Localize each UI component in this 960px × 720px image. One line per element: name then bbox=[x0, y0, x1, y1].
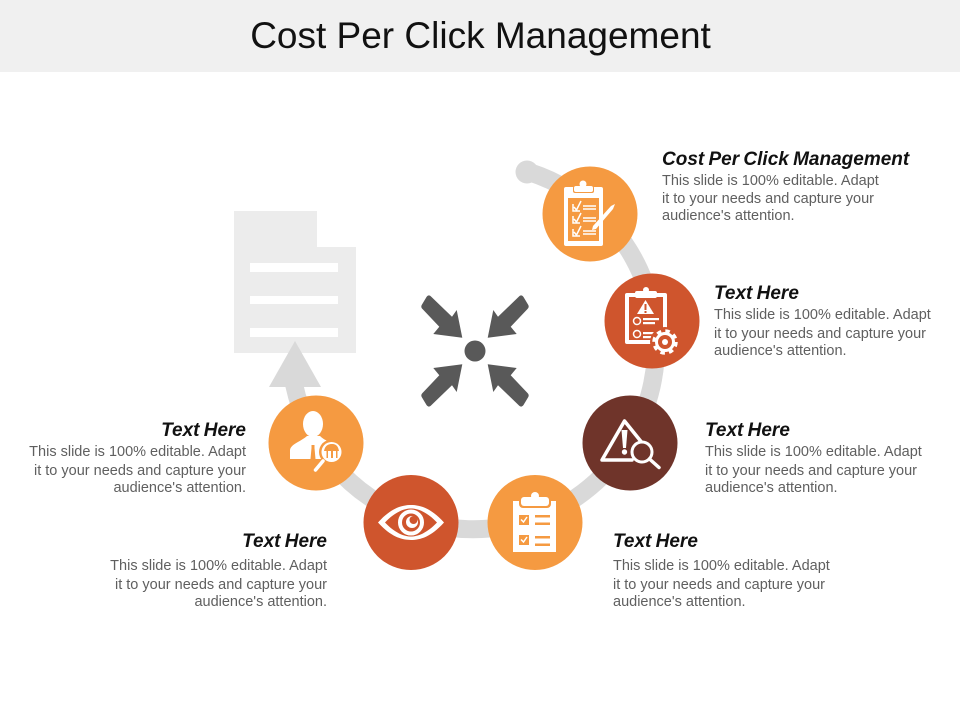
text: Cost Per Click Management: audience's attention. bbox=[662, 208, 795, 224]
step 2: warning clipboard circle bbox=[604, 274, 700, 368]
icon: four arrows pointing to centre bbox=[421, 295, 529, 407]
step 6: person search circle bbox=[268, 396, 364, 490]
text: step 6: audience's attention. bbox=[113, 480, 246, 496]
text: step 5: Text Here bbox=[242, 531, 327, 552]
title banner: Cost Per Click Management bbox=[250, 15, 712, 56]
text: step 2: This slide is 100% editable. Adapt bbox=[714, 307, 931, 323]
text: step 5: it to your needs and capture your bbox=[115, 577, 327, 593]
text: step 6: Text Here bbox=[161, 420, 246, 441]
text: step 4: audience's attention. bbox=[613, 594, 746, 610]
step 4: clipboard circle bbox=[488, 475, 582, 570]
text: step 4: it to your needs and capture your bbox=[613, 577, 825, 593]
text: Cost Per Click Management bbox=[662, 149, 910, 224]
text: step 5: audience's attention. bbox=[194, 594, 327, 610]
step 1: checklist circle bbox=[542, 166, 638, 262]
text: step 2: it to your needs and capture your bbox=[714, 326, 926, 342]
text: step 3: Text Here bbox=[705, 420, 790, 441]
step 3: warning search circle bbox=[582, 396, 678, 490]
text: step 3: This slide is 100% editable. Adapt bbox=[705, 444, 922, 460]
curved arrow path bbox=[269, 160, 656, 529]
text: step 2: audience's attention. bbox=[714, 343, 847, 359]
text: step 6: it to your needs and capture your bbox=[34, 463, 246, 479]
text: step 4: Text Here bbox=[613, 531, 698, 552]
text: step 6 bbox=[29, 420, 246, 496]
text: step 5 bbox=[110, 531, 327, 610]
text: Cost Per Click Management: Cost Per Click Management bbox=[662, 149, 910, 170]
text: step 5: This slide is 100% editable. Adapt bbox=[110, 558, 327, 574]
text: step 3: it to your needs and capture your bbox=[705, 463, 917, 479]
text: step 3: audience's attention. bbox=[705, 480, 838, 496]
text: step 2: Text Here bbox=[714, 283, 799, 304]
text: Cost Per Click Management: it to your needs and capture your bbox=[662, 191, 874, 207]
step 5: eye circle bbox=[364, 475, 458, 570]
text: step 6: This slide is 100% editable. Adapt bbox=[29, 444, 246, 460]
text: Cost Per Click Management: This slide is 100% editable. Adapt bbox=[662, 173, 879, 189]
text: step 3 bbox=[705, 420, 922, 496]
text: step 4 bbox=[613, 531, 830, 610]
title banner bbox=[0, 0, 960, 72]
icon: document background bbox=[234, 211, 356, 353]
text: step 4: This slide is 100% editable. Adapt bbox=[613, 558, 830, 574]
text: step 2 bbox=[714, 283, 931, 359]
